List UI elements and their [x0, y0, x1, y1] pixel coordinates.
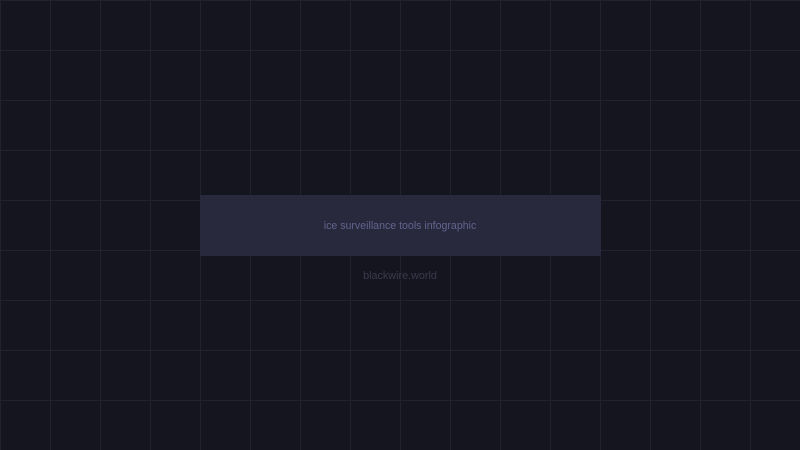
title: ice surveillance tools infographic	[324, 220, 476, 232]
panel: title banner	[200, 195, 601, 256]
source label: blackwire.world	[363, 270, 437, 282]
